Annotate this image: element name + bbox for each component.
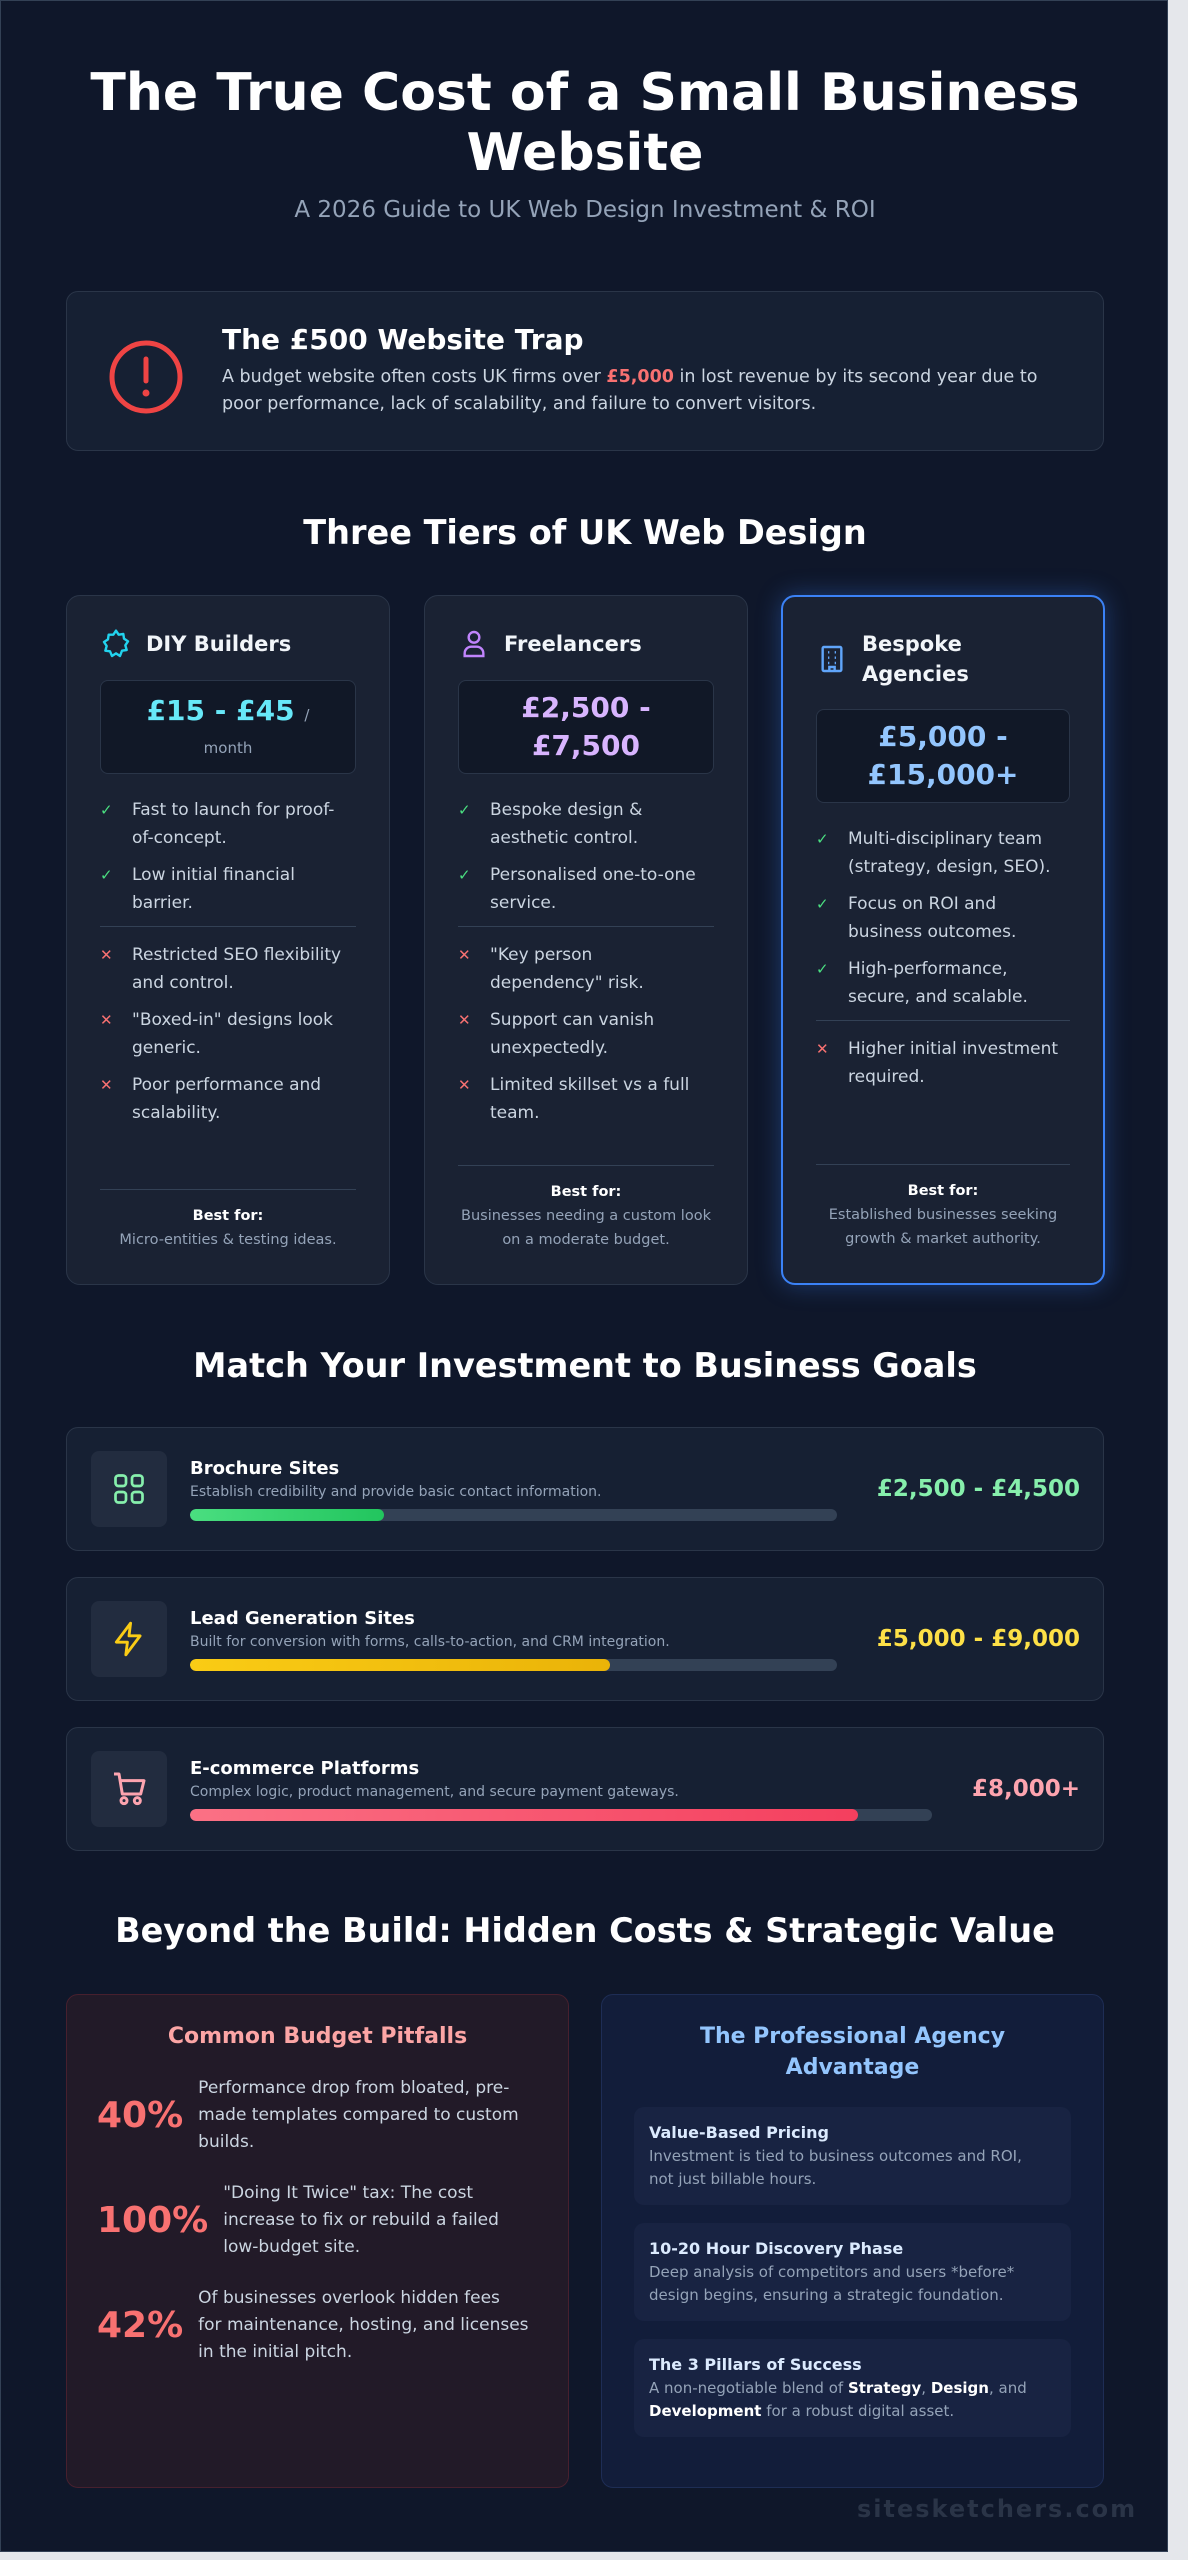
pros/cons list: Personalised one-to-one service. (490, 865, 696, 913)
panel heading: The Professional Agency (700, 2024, 1005, 2049)
stat 40%: Performance drop from bloated, pre-made templates compared to custom builds. (198, 2078, 519, 2152)
title (90, 63, 1080, 183)
value-based pricing (634, 2107, 1071, 2205)
pros/cons list: ✕ (458, 946, 471, 964)
pros/cons list (816, 829, 1070, 1087)
price: £8,000+ (972, 1776, 1080, 1802)
pros/cons list: ✓ (458, 801, 471, 819)
callout: £500 website trap (66, 291, 1104, 451)
heading: three tiers: Three Tiers of UK Web Design (303, 513, 867, 552)
row text and bar (190, 1458, 837, 1521)
best for (100, 1189, 356, 1252)
stat 100%: "Doing It Twice" tax: The cost increase to fix or rebuild a failed low-budget site. (223, 2183, 499, 2257)
pros/cons list: ✕ (458, 1011, 471, 1029)
stat 42%: Of businesses overlook hidden fees (198, 2288, 500, 2308)
subtitle: A 2026 Guide to UK Web Design Investment & ROI (294, 197, 876, 223)
pros/cons list: Low initial financial barrier. (132, 865, 295, 913)
panel: freelancers (424, 595, 748, 1285)
pros/cons list: ✓ (100, 801, 113, 819)
panel heading: Advantage (786, 2055, 919, 2080)
pros/cons list: Poor performance and scalability. (132, 1075, 321, 1123)
icon: grid (91, 1451, 167, 1527)
panel: budget pitfalls (66, 1994, 569, 2488)
value-based pricing: Investment is tied to business outcomes and ROI, not just billable hours. (649, 2147, 1022, 2188)
callout text: The £500 Website Trap (222, 323, 584, 356)
panel: agency advantage (601, 1994, 1104, 2488)
card header (463, 630, 642, 658)
pros/cons list: Higher initial investment required. (848, 1039, 1058, 1087)
stat 42% (97, 2288, 529, 2362)
3 pillars: The 3 Pillars of Success (649, 2355, 862, 2374)
pros/cons list (458, 800, 714, 1123)
value-based pricing: Value-Based Pricing (649, 2123, 829, 2142)
pros/cons list: ✓ (816, 960, 829, 978)
callout text: A budget website often costs UK firms over £5,000 in lost revenue by its second year due to poor performance, lack of scalability, and failure to convert visitors. (222, 367, 1037, 414)
pros/cons list: Multi-disciplinary team (strategy, design, SEO). (848, 829, 1050, 877)
card header: Agencies (862, 662, 969, 686)
watermark: sitesketchers.com (857, 2495, 1137, 2523)
pros/cons list: Limited skillset vs a full team. (490, 1075, 689, 1123)
pros/cons list: "Boxed-in" designs look generic. (132, 1010, 333, 1058)
card header: DIY Builders (146, 632, 291, 656)
price (100, 680, 356, 774)
pros/cons list: Bespoke design & aesthetic control. (490, 800, 642, 848)
heading: match investment: Match Your Investment to Business Goals (193, 1346, 977, 1385)
row text and bar: Establish credibility and provide basic contact information. (190, 1484, 602, 1500)
price: month (204, 739, 252, 757)
best for: Best for: (908, 1183, 978, 1199)
price: £15,000+ (868, 758, 1018, 791)
price: £7,500 (532, 729, 640, 762)
best for: Established businesses seeking growth & market authority. (829, 1207, 1057, 1247)
row text and bar: Lead Generation Sites (190, 1608, 415, 1629)
pros/cons list: "Key person dependency" risk. (490, 945, 644, 993)
row text and bar (190, 1608, 837, 1671)
best for: Businesses needing a custom look on a moderate budget. (461, 1208, 711, 1248)
panel: bespoke agencies (781, 595, 1105, 1285)
heading: beyond the build: Beyond the Build: Hidden Costs & Strategic Value (115, 1911, 1055, 1950)
price (816, 709, 1070, 803)
pros/cons list: ✕ (100, 946, 113, 964)
price: £5,000 - £9,000 (877, 1626, 1080, 1652)
pros/cons list: ✕ (816, 1040, 829, 1058)
price (458, 680, 714, 774)
panel heading: Common Budget Pitfalls (168, 2024, 467, 2049)
best for: Best for: (193, 1208, 263, 1224)
pros/cons list: ✓ (100, 866, 113, 884)
pros/cons list: Support can vanish unexpectedly. (490, 1010, 654, 1058)
price: £2,500 - (521, 691, 651, 724)
stat 42%: for maintenance, hosting, and licenses (198, 2315, 529, 2335)
discovery phase: Deep analysis of competitors and users *before* design begins, ensuring a strategic foundation. (649, 2263, 1014, 2304)
row: e-commerce (66, 1727, 1104, 1851)
pros/cons list: ✓ (458, 866, 471, 884)
card header (102, 629, 291, 658)
3 pillars (634, 2339, 1071, 2437)
panel: DIY builders (66, 595, 390, 1285)
stat 42%: 42% (97, 2305, 183, 2346)
pros/cons list: Restricted SEO flexibility and control. (132, 945, 341, 993)
pros/cons list (100, 800, 356, 1123)
row text and bar (190, 1758, 932, 1821)
row text and bar: Complex logic, product management, and secure payment gateways. (190, 1784, 679, 1800)
pros/cons list: ✕ (100, 1011, 113, 1029)
discovery phase: 10-20 Hour Discovery Phase (649, 2239, 903, 2258)
best for (816, 1164, 1070, 1251)
icon: cart (91, 1751, 167, 1827)
stat 100% (97, 2183, 499, 2257)
pros/cons list: ✕ (100, 1076, 113, 1094)
pros/cons list: ✕ (458, 1076, 471, 1094)
best for: Best for: (551, 1184, 621, 1200)
stat 40%: 40% (97, 2095, 183, 2136)
row text and bar: Built for conversion with forms, calls-to-action, and CRM integration. (190, 1634, 670, 1650)
best for: Micro-entities & testing ideas. (119, 1232, 337, 1248)
price: £15 - £45 / (147, 694, 309, 727)
discovery phase (634, 2223, 1071, 2321)
stat 100%: 100% (97, 2200, 208, 2241)
panel heading (700, 2024, 1005, 2080)
pros/cons list: Fast to launch for proof-of-concept. (132, 800, 334, 848)
row text and bar: E-commerce Platforms (190, 1758, 419, 1779)
3 pillars: A non-negotiable blend of Strategy, Design, and Development for a robust digital asset. (649, 2379, 1027, 2420)
card header (821, 632, 969, 686)
title: The True Cost of a Small Business (90, 63, 1080, 123)
price: £5,000 - (878, 720, 1008, 753)
callout text (222, 323, 1037, 414)
card header: Freelancers (504, 632, 642, 656)
title: Website (467, 123, 703, 183)
icon: bolt (91, 1601, 167, 1677)
card header: Bespoke (862, 632, 962, 656)
pros/cons list: High-performance, secure, and scalable. (848, 959, 1028, 1007)
pros/cons list: ✓ (816, 830, 829, 848)
row: lead generation (66, 1577, 1104, 1701)
stat 42%: in the initial pitch. (198, 2342, 352, 2362)
price: £2,500 - £4,500 (877, 1476, 1080, 1502)
icon: alert (110, 340, 182, 414)
row text and bar: Brochure Sites (190, 1458, 339, 1479)
pros/cons list: Focus on ROI and business outcomes. (848, 894, 1016, 942)
best for (458, 1165, 714, 1252)
row: brochure sites (66, 1427, 1104, 1551)
pros/cons list: ✓ (816, 895, 829, 913)
